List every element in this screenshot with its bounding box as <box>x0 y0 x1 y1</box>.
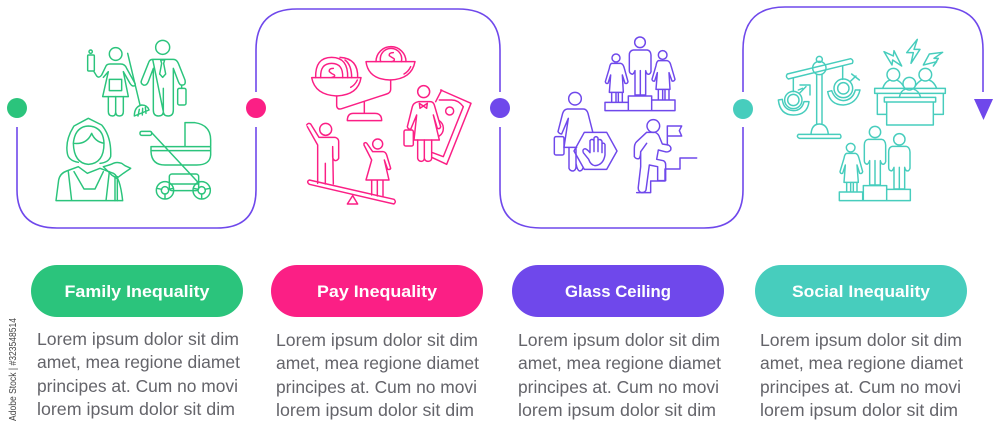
step marker: teal <box>733 99 753 119</box>
timeline connector line <box>17 7 983 228</box>
heading pill: glass ceiling: Glass Ceiling <box>565 282 671 301</box>
icon: people on podium <box>605 37 675 111</box>
icon: woman with bottle and rake <box>88 48 149 116</box>
icons: glass ceiling <box>554 37 697 193</box>
heading pill: family inequality <box>31 265 243 317</box>
text block: pay inequality: lorem ipsum dolor sit dim <box>276 400 474 420</box>
step marker: purple <box>490 98 510 118</box>
text block: glass ceiling: amet, mea regione diamet <box>518 353 721 373</box>
text block: social inequality <box>760 330 963 420</box>
text block: social inequality: principes at. Cum no movi <box>760 377 961 397</box>
text block: glass ceiling: lorem ipsum dolor sit dim <box>518 400 716 420</box>
icon: baby stroller <box>140 123 211 199</box>
icon: woman with banknote <box>404 86 471 164</box>
icons: social inequality <box>778 39 945 201</box>
text block: pay inequality <box>276 330 479 420</box>
step marker: pink <box>246 98 266 118</box>
panel: glass ceiling <box>512 265 724 420</box>
text block: family inequality: lorem ipsum dolor sit dim <box>37 399 235 419</box>
icon: balance scale with coins <box>312 47 415 121</box>
icon: housekeeper with duster <box>56 118 131 201</box>
icon: gender balance scale <box>778 56 860 138</box>
text block: glass ceiling <box>518 330 721 420</box>
heading pill: social inequality: Social Inequality <box>792 282 931 301</box>
text block: pay inequality: principes at. Cum no movi <box>276 377 477 397</box>
text block: social inequality: amet, mea regione diamet <box>760 353 963 373</box>
icon: people on podium <box>839 126 910 201</box>
text block: family inequality: principes at. Cum no movi <box>37 376 238 396</box>
text block: family inequality: amet, mea regione diamet <box>37 352 240 372</box>
text block: glass ceiling: principes at. Cum no movi <box>518 377 719 397</box>
panel: family inequality <box>31 265 243 419</box>
heading pill: pay inequality <box>271 265 483 317</box>
icon: person climbing stairs with flag <box>634 120 697 193</box>
panel: social inequality <box>755 265 967 420</box>
heading pill: social inequality <box>755 265 967 317</box>
arrowhead <box>974 99 993 120</box>
icon: woman with stop sign <box>554 92 617 171</box>
heading pill: glass ceiling <box>512 265 724 317</box>
heading pill: family inequality: Family Inequality <box>64 282 210 301</box>
text block: family inequality <box>37 329 240 419</box>
text block: glass ceiling: Lorem ipsum dolor sit dim <box>518 330 720 350</box>
icon: man with briefcase <box>141 40 186 116</box>
text block: pay inequality: amet, mea regione diamet <box>276 353 479 373</box>
text block: pay inequality: Lorem ipsum dolor sit dim <box>276 330 478 350</box>
icon: man and woman on seesaw <box>307 123 395 204</box>
icons: pay inequality <box>307 47 471 204</box>
icon: conflict at table with lightning <box>875 39 945 125</box>
text block: family inequality: Lorem ipsum dolor sit dim <box>37 329 239 349</box>
text block: social inequality: Lorem ipsum dolor sit dim <box>760 330 962 350</box>
stock id label: Adobe Stock | #323548514 <box>8 318 19 421</box>
icons: family inequality <box>56 40 211 201</box>
heading pill: pay inequality: Pay Inequality <box>317 282 438 301</box>
panel: pay inequality <box>271 265 483 420</box>
step marker: green <box>7 98 27 118</box>
text block: social inequality: lorem ipsum dolor sit dim <box>760 400 958 420</box>
